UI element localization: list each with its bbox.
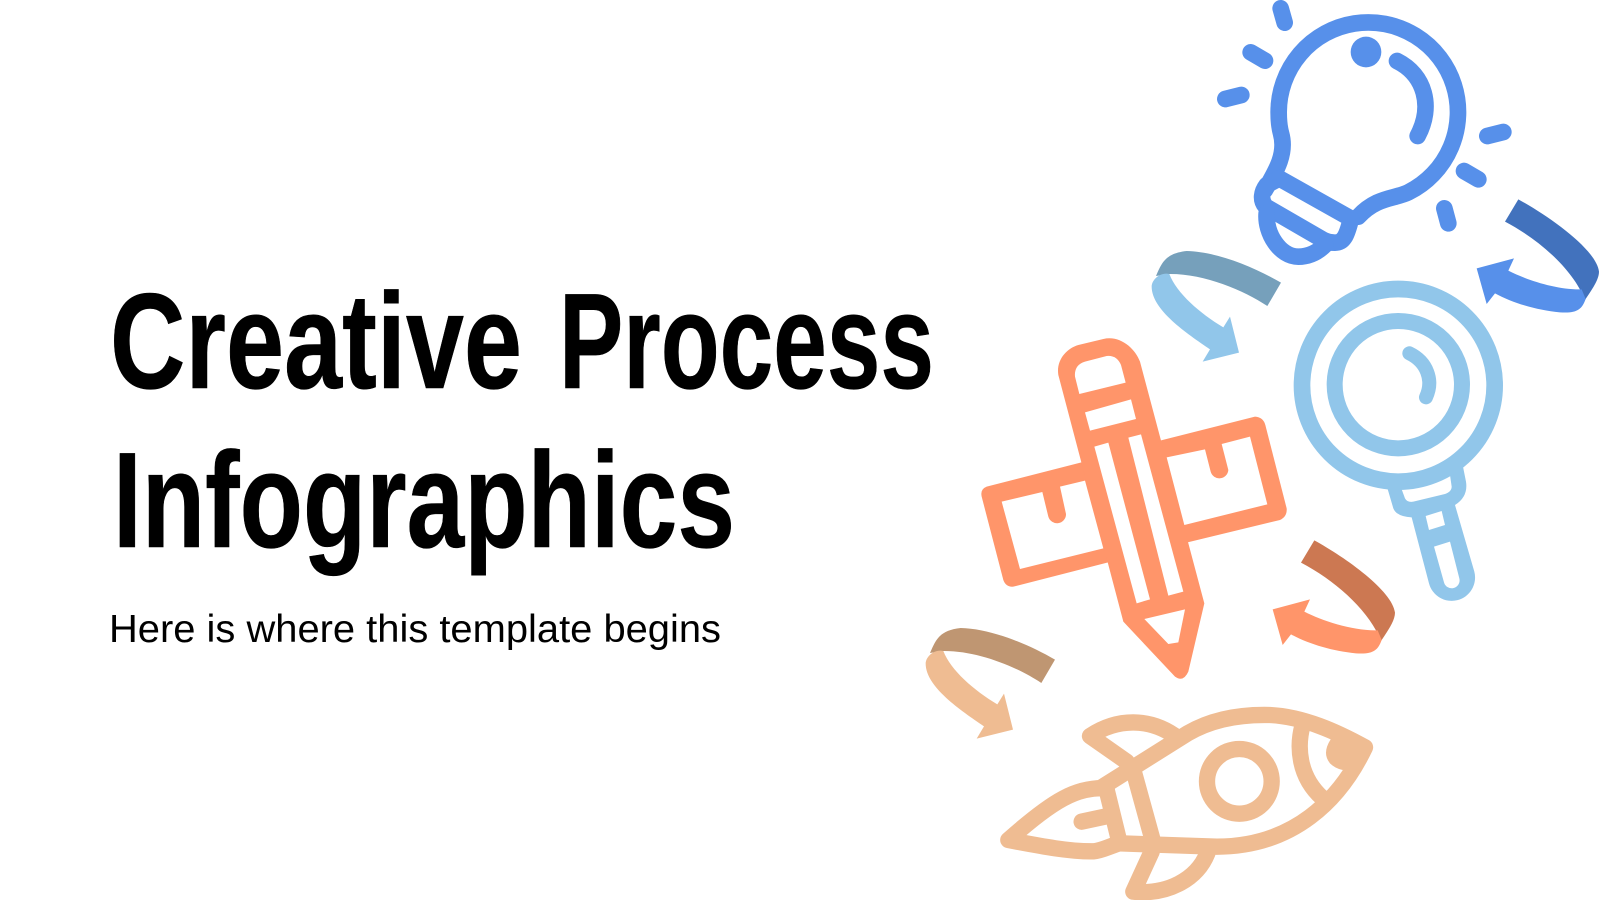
title: Process (559, 265, 934, 417)
arrow: tan, into rocket (926, 628, 1055, 739)
title: Infographics (113, 424, 735, 576)
arrow: blue, from bulb to magnifier (1477, 199, 1599, 312)
icon: rocket (1008, 715, 1370, 892)
icon: light bulb (1225, 8, 1503, 257)
icon: magnifying glass (1302, 289, 1495, 601)
icon: pencil and ruler (981, 338, 1287, 679)
arrow: orange, from pencil to rocket (1273, 540, 1395, 653)
title: Creative (110, 265, 522, 417)
subtitle: Here is where this template begins (109, 608, 721, 651)
title (110, 265, 934, 576)
arrow: light blue, from magnifier to pencil (1152, 251, 1281, 362)
